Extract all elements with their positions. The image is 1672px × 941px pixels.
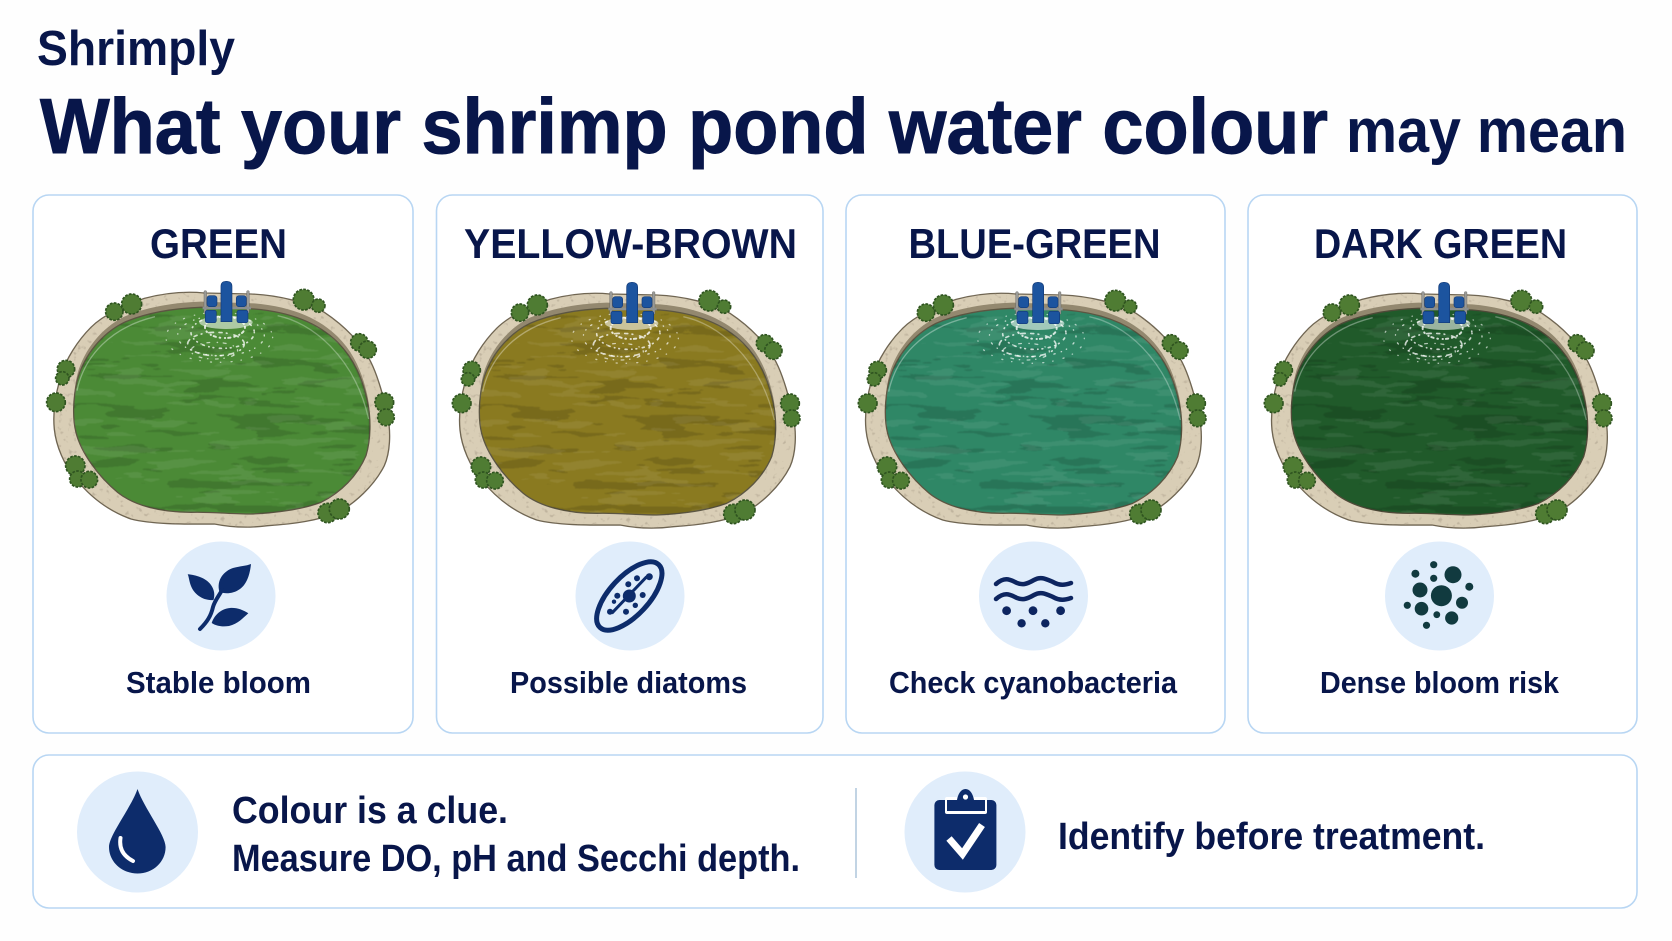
heading: yellow-brown: YELLOW-BROWN (464, 220, 797, 267)
panel: bottom advice bar (33, 755, 1637, 908)
title: What your shrimp pond water colour (40, 82, 1328, 170)
pond: yellow-brown water (450, 282, 803, 533)
icon: water drop (77, 772, 198, 892)
text: colour is a clue (232, 790, 800, 880)
pond: green water (44, 281, 398, 532)
heading: blue-green: BLUE-GREEN (908, 220, 1160, 267)
icon: diatom (576, 542, 684, 650)
text: colour is a clue: Colour is a clue. (232, 790, 508, 832)
title: may mean (1346, 97, 1627, 166)
heading: green: GREEN (150, 220, 287, 267)
panel: green (33, 195, 413, 733)
panel: yellow-brown (436, 195, 823, 733)
icon: dense cells (1385, 542, 1494, 650)
text: identify before treatment: Identify before treatment. (1058, 816, 1485, 858)
pond: blue-green water (856, 282, 1209, 533)
icon: leaf sprig (166, 542, 276, 650)
label: possible diatoms: Possible diatoms (510, 665, 747, 700)
heading: dark green: DARK GREEN (1314, 220, 1567, 267)
icon: waves and cells (979, 542, 1088, 650)
panel: dark green (1248, 195, 1637, 733)
icon: clipboard check (904, 772, 1026, 892)
panel: blue-green (846, 195, 1225, 733)
label: stable bloom: Stable bloom (126, 665, 311, 700)
pond: dark green water (1262, 282, 1615, 533)
text: colour is a clue: Measure DO, pH and Secchi depth. (232, 838, 800, 880)
label: dense bloom risk: Dense bloom risk (1320, 665, 1560, 700)
label: check cyanobacteria: Check cyanobacteria (889, 665, 1178, 700)
brand name: Shrimply (37, 22, 235, 76)
